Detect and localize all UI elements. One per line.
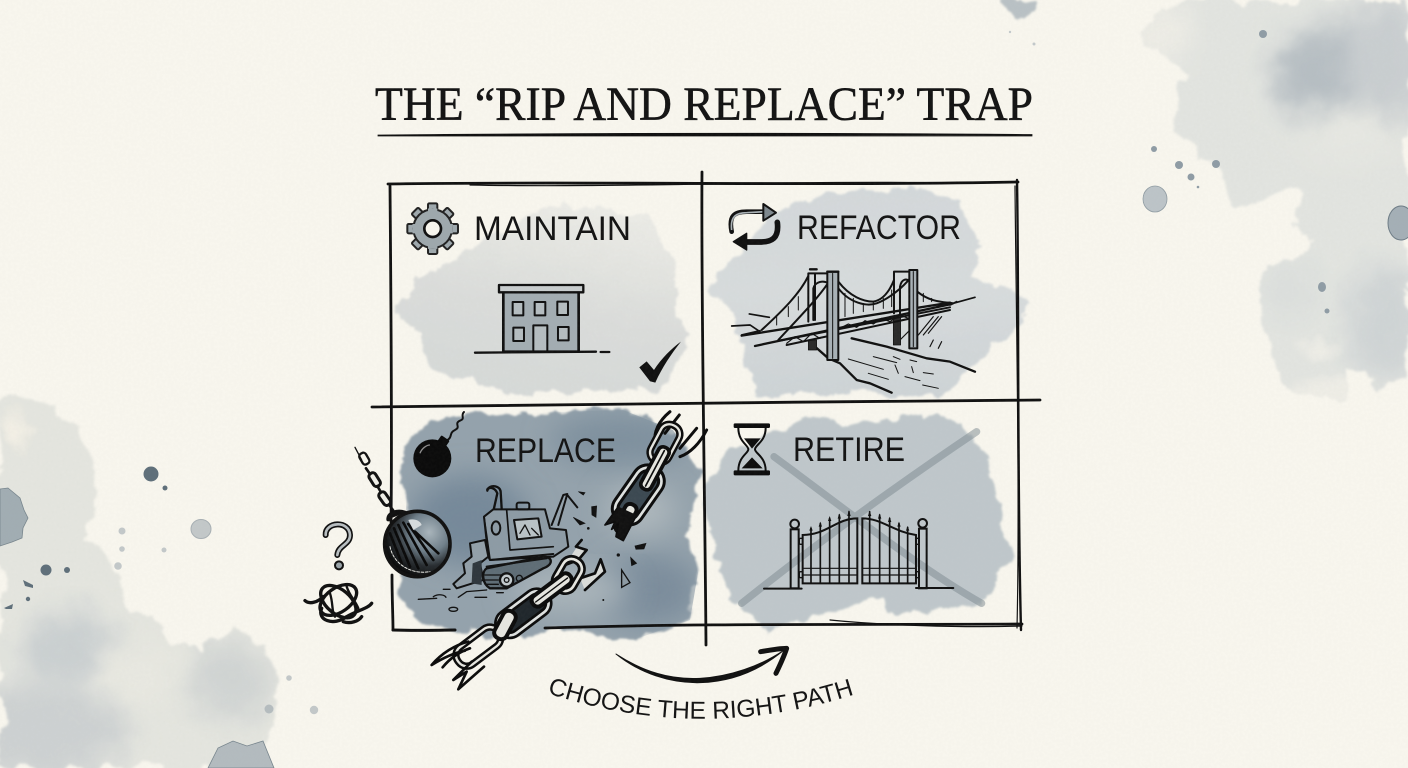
heading: refactor: REFACTOR <box>797 209 961 247</box>
panel: retire <box>734 424 982 603</box>
icon: check mark <box>639 342 681 383</box>
blot: top edge <box>1002 0 1036 20</box>
illustration: suspension bridge <box>732 269 975 393</box>
panel: maintain <box>407 203 681 383</box>
heading: retire: RETIRE <box>793 431 905 469</box>
icon: question mark and tangled knot <box>305 524 372 624</box>
heading: maintain: MAINTAIN <box>474 210 631 248</box>
illustration: broken chain, upper <box>605 412 707 541</box>
blot: left edge <box>0 488 28 546</box>
grid frame: hand-drawn quadrant lines <box>372 172 1040 645</box>
title: THE “RIP AND REPLACE” TRAP <box>375 78 1033 131</box>
illustration: debris shards <box>573 492 646 601</box>
icon: hourglass <box>734 424 770 475</box>
icon: bomb <box>413 412 464 477</box>
icon: building <box>475 285 609 353</box>
icon: cycle arrows <box>731 204 778 250</box>
panel: refactor <box>731 204 975 393</box>
caption: choose the right path: CHOOSE THE RIGHT PATH <box>550 679 852 719</box>
icon: crossed-out strokes <box>742 432 982 603</box>
watercolor washes inside the quadrants <box>397 190 1030 640</box>
watercolor wash: top right <box>1002 0 1408 410</box>
blot: bottom edge <box>208 741 274 768</box>
illustration: wrecking ball and chain <box>355 447 450 577</box>
icon: gear <box>407 203 458 254</box>
illustration: bulldozer <box>418 486 577 611</box>
ink spots: bottom left <box>4 466 168 609</box>
heading: replace: REPLACE <box>475 432 616 470</box>
watercolor wash: bottom left <box>0 390 318 768</box>
arrow: curved brush stroke <box>616 648 787 683</box>
ink spots: top right <box>1151 30 1330 314</box>
illustration: broken chain, lower <box>432 540 605 689</box>
blot: mid right <box>1143 186 1167 212</box>
illustration: closed gate <box>764 510 953 589</box>
panel: replace <box>305 412 707 689</box>
